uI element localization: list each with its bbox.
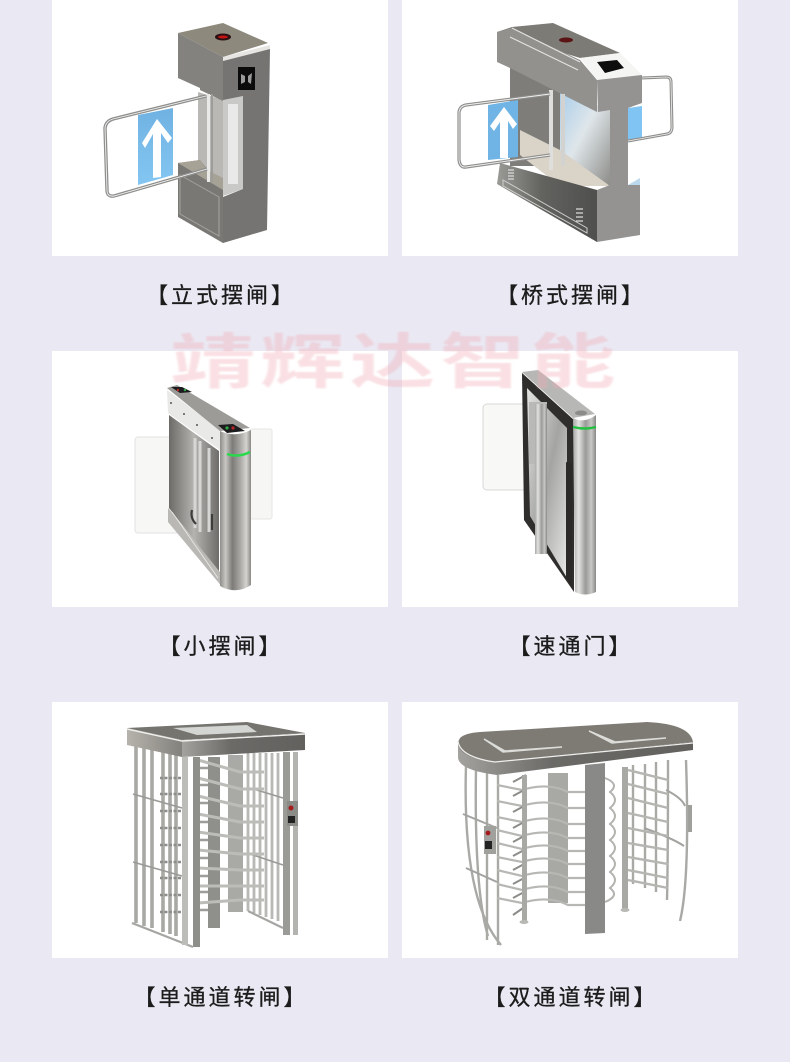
icon: bridge swing gate illustration [459, 23, 672, 242]
label: 小摆闸: 【小摆闸】 [158, 634, 284, 659]
right gate with blue panel [628, 77, 672, 141]
left gate with blue panel and arrow [459, 94, 550, 167]
icon: small swing gate illustration [135, 385, 272, 590]
panel: 速通门 [402, 351, 738, 607]
icon: vertical swing gate illustration [105, 23, 270, 243]
panel: 单通道转闸 [52, 702, 388, 958]
label: 速通门: 【速通门】 [508, 634, 634, 659]
label: 桥式摆闸: 【桥式摆闸】 [496, 283, 646, 308]
panel: 桥式摆闸 [402, 0, 738, 256]
control box [484, 826, 496, 854]
label: 立式摆闸: 【立式摆闸】 [146, 283, 296, 308]
watermark: 靖辉达智能 [170, 315, 620, 401]
roof panels [484, 731, 666, 752]
blue gate panel with arrow [138, 108, 173, 185]
icon: single-lane full height turnstile illustration [127, 722, 305, 947]
panel: 小摆闸 [52, 351, 388, 607]
icon: dual-lane full height turnstile illustration [458, 722, 693, 945]
panel: 双通道转闸 [402, 702, 738, 958]
panel: 立式摆闸 [52, 0, 388, 256]
label: 单通道转闸: 【单通道转闸】 [133, 985, 309, 1010]
label: 双通道转闸: 【双通道转闸】 [483, 985, 659, 1010]
control box [287, 801, 298, 826]
icon: speed gate illustration [483, 370, 596, 594]
